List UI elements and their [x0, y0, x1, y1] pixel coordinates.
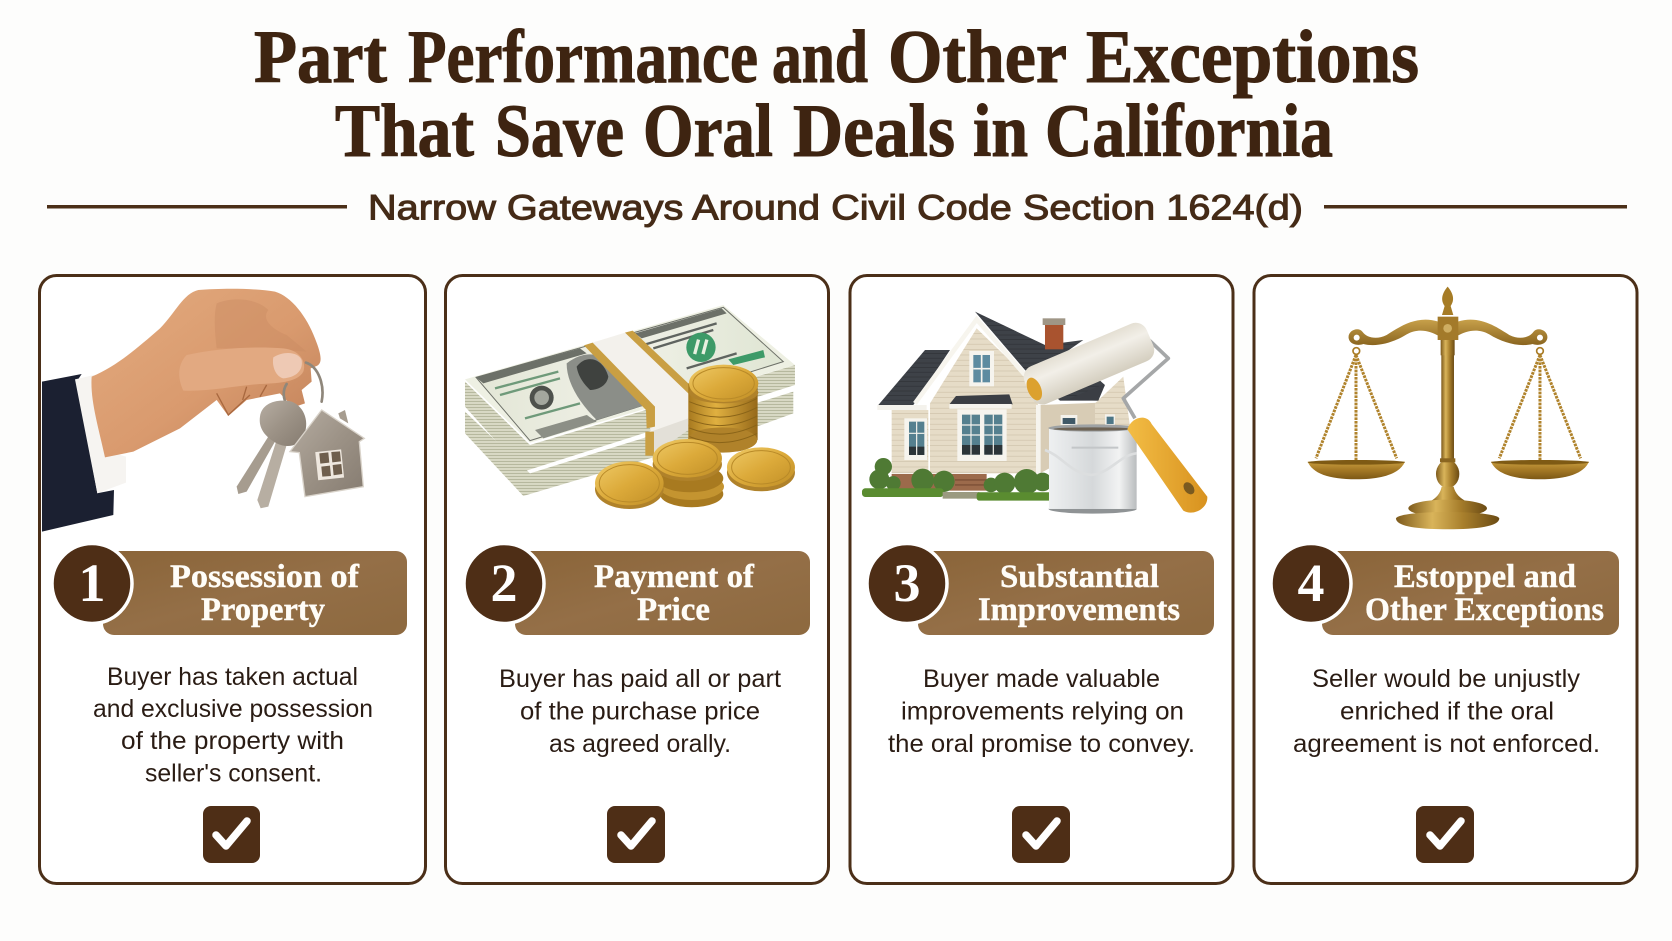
panel: substantial improvements: [850, 276, 1233, 884]
icon: checkmark: [1012, 806, 1070, 863]
heading: [1365, 559, 1604, 628]
icon: checkmark: [1416, 806, 1474, 863]
subtitle with rules: [47, 188, 1627, 228]
description: the oral promise to convey.: [888, 730, 1195, 758]
heading: Substantial: [1000, 559, 1159, 595]
title: [254, 16, 1419, 173]
number 3: [867, 544, 947, 624]
title: Part: [254, 16, 387, 99]
description: [499, 665, 781, 758]
banner: possession of property: [52, 544, 407, 635]
icon: checkmark: [607, 806, 665, 863]
paint can: [1045, 424, 1137, 514]
title: Save: [495, 90, 624, 173]
description: [1293, 665, 1600, 758]
description: Seller would be unjustly: [1312, 665, 1581, 693]
heading: Payment of: [594, 559, 755, 595]
heading: [170, 559, 360, 628]
heading: Improvements: [978, 592, 1180, 628]
title: in: [973, 90, 1028, 173]
heading: Price: [637, 592, 710, 628]
icon: money stack and coins: [465, 305, 795, 509]
title: Performance: [408, 16, 758, 99]
heading: Other Exceptions: [1365, 592, 1604, 628]
panel: possession of property: [40, 276, 426, 884]
subtitle with rules: Narrow Gateways Around Civil Code Section 1624(d): [368, 188, 1303, 228]
icon: checkmark: [203, 806, 260, 863]
description: Buyer has paid all or part: [499, 665, 781, 693]
number 1: [52, 544, 132, 624]
title: Deals: [793, 90, 955, 173]
icon: balance scales: [1308, 287, 1589, 529]
heading: [978, 559, 1180, 628]
icon: house with paint roller and can: [862, 312, 1207, 514]
title: California: [1045, 90, 1333, 173]
description: seller's consent.: [145, 760, 322, 788]
banner: payment of price: [464, 544, 810, 635]
heading: Estoppel and: [1394, 559, 1576, 595]
description: Buyer has taken actual: [107, 663, 358, 691]
number 2: [464, 544, 544, 624]
description: enriched if the oral: [1340, 698, 1554, 726]
title: That: [335, 90, 474, 173]
description: agreement is not enforced.: [1293, 730, 1600, 758]
title: Other: [888, 16, 1067, 99]
coins front: [595, 439, 795, 509]
banner: substantial improvements: [867, 544, 1214, 635]
paint roller: [1020, 319, 1207, 513]
description: as agreed orally.: [549, 730, 731, 758]
description: Buyer made valuable: [923, 665, 1160, 693]
title: Exceptions: [1086, 16, 1419, 99]
panel: estoppel and other exceptions: [1254, 276, 1637, 884]
heading: Possession of: [170, 559, 360, 595]
number 3: 3: [894, 553, 920, 613]
number 4: [1271, 544, 1351, 624]
title: and: [772, 16, 868, 99]
icon: hand holding keys: [42, 289, 364, 532]
description: of the property with: [121, 727, 344, 755]
description: of the purchase price: [520, 698, 760, 726]
description: and exclusive possession: [93, 695, 373, 723]
title: Oral: [643, 90, 773, 173]
description: [93, 663, 373, 788]
number 2: 2: [490, 553, 518, 613]
number 1: 1: [78, 553, 106, 613]
banner: estoppel and other exceptions: [1271, 544, 1619, 635]
coin stack: [688, 365, 758, 453]
heading: Property: [201, 592, 325, 628]
number 4: 4: [1298, 553, 1324, 613]
panel: payment of price: [446, 276, 828, 884]
description: improvements relying on: [901, 698, 1184, 726]
heading: [594, 559, 755, 628]
description: [888, 665, 1195, 758]
